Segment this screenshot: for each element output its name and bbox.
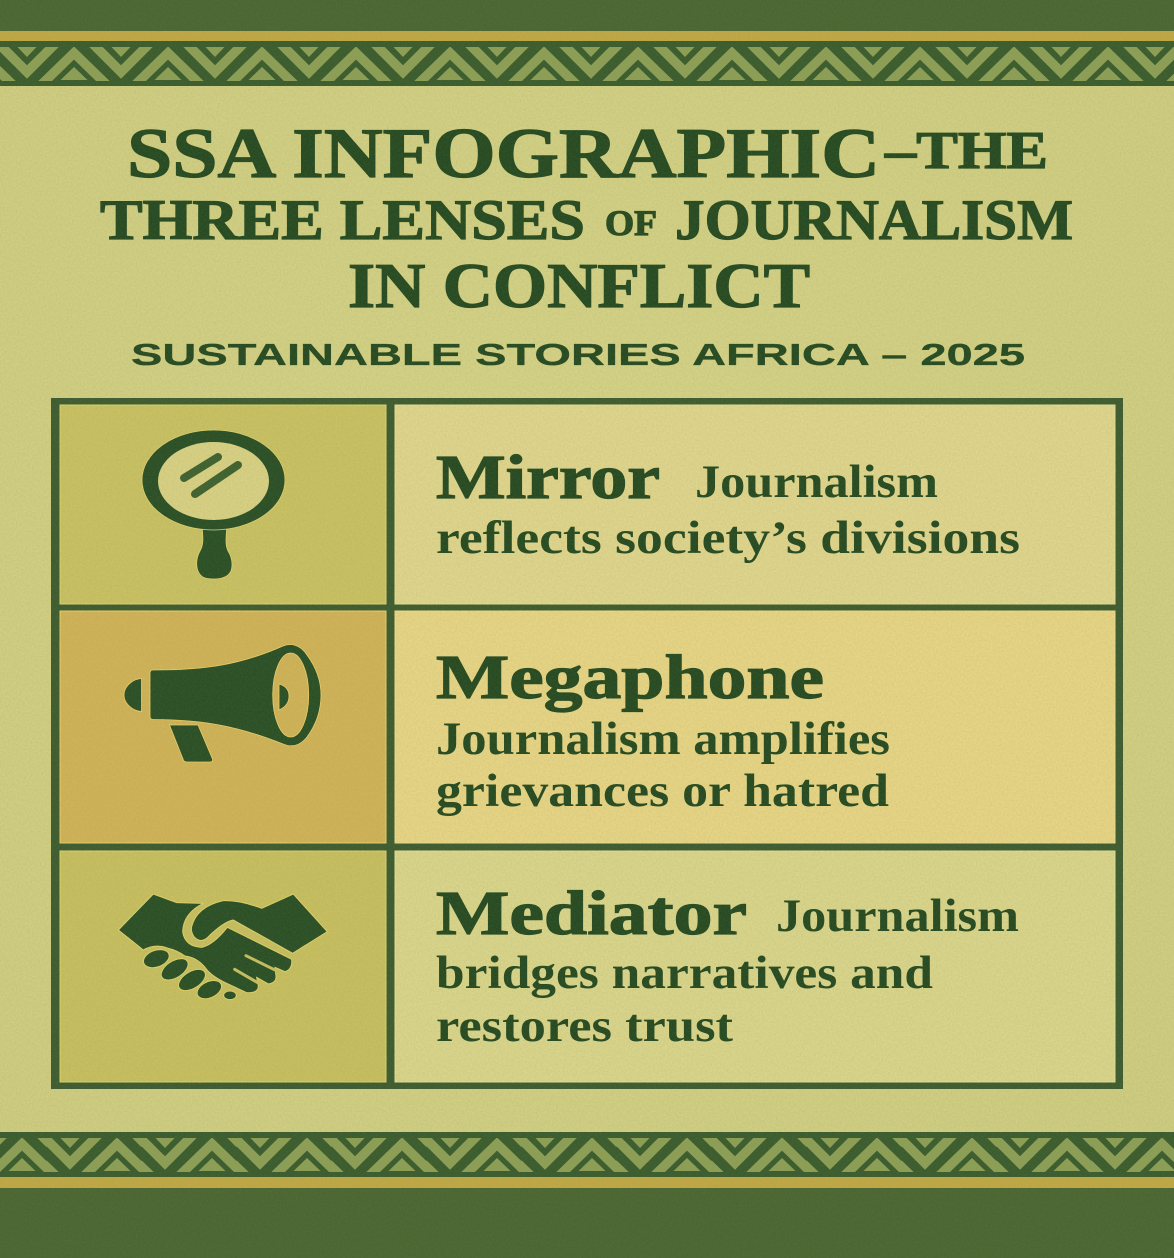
mediator text: bridges narratives and [436,947,933,999]
top decorative border [0,0,1174,86]
icon: handshake [118,894,327,1002]
title: –THE [884,122,1048,180]
bottom decorative border [0,1132,1174,1258]
mirror text cell [395,405,1115,604]
subtitle: SUSTAINABLE STORIES AFRICA – 2025 [131,337,1025,372]
mediator text: restores trust [436,1000,733,1052]
mediator text [436,880,1019,1052]
panel: megaphone [60,611,1115,843]
megaphone text [436,644,890,817]
title: THREE LENSES [100,189,585,252]
mirror text: reflects society’s divisions [436,512,1020,564]
mediator text: Mediator [436,880,747,948]
megaphone text cell [395,611,1115,843]
mirror text: Journalism [695,456,938,508]
table frame [55,402,1119,1085]
megaphone text: Journalism amplifies [436,713,890,765]
title [100,115,1073,321]
mirror icon cell [60,405,386,604]
title: IN CONFLICT [348,251,810,321]
mediator text: Journalism [776,890,1019,942]
title: SSA INFOGRAPHIC [127,115,880,193]
mirror text: Mirror [436,444,660,512]
panel: mediator [60,851,1115,1082]
panel: mirror [60,405,1115,604]
icon: megaphone [124,645,321,762]
megaphone text: Megaphone [436,644,824,712]
title: JOURNALISM [675,189,1073,252]
mirror text [436,444,1020,564]
mediator icon cell [60,851,386,1082]
icon: hand mirror [142,430,285,579]
megaphone text: grievances or hatred [436,765,889,817]
mediator text cell [395,851,1115,1082]
title: OF [605,203,657,243]
megaphone icon cell [60,611,386,843]
